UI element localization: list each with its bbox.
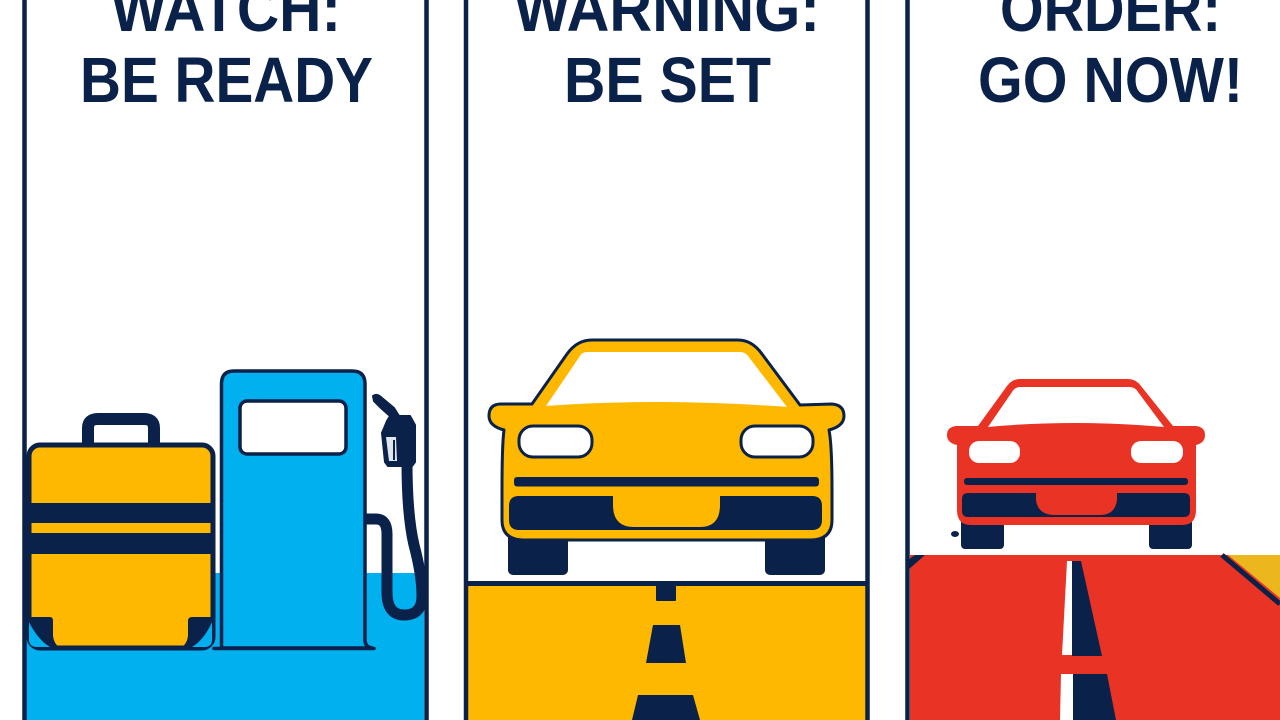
red road [910,555,1280,720]
road edge lines [1222,555,1280,604]
yellow road [467,584,866,720]
yellow road shoulder [1228,555,1280,598]
icon: yellow car [489,340,844,575]
heading: order go now: GO NOW! [978,44,1243,116]
fuel hose [366,462,422,615]
panel: order [908,0,1280,720]
heading: warning be set: BE SET [564,44,771,116]
panel: watch [24,0,426,720]
road centre line [1060,561,1116,720]
blue ground [26,573,424,720]
icon: red car [947,379,1205,549]
icon: suitcase [27,419,214,648]
road horizon line [467,581,866,586]
heading: warning be set [514,0,820,116]
panel borders [24,0,426,720]
fuel nozzle [373,395,415,466]
heading: watch be ready [80,0,373,116]
heading: order go now [978,0,1243,116]
heading: watch be ready: BE READY [80,44,373,116]
road left corner [908,555,925,570]
road dashes [632,585,700,720]
panel: warning [466,0,868,720]
panel borders [466,0,868,720]
icon: fuel pump [214,371,422,648]
panel border [905,0,910,720]
